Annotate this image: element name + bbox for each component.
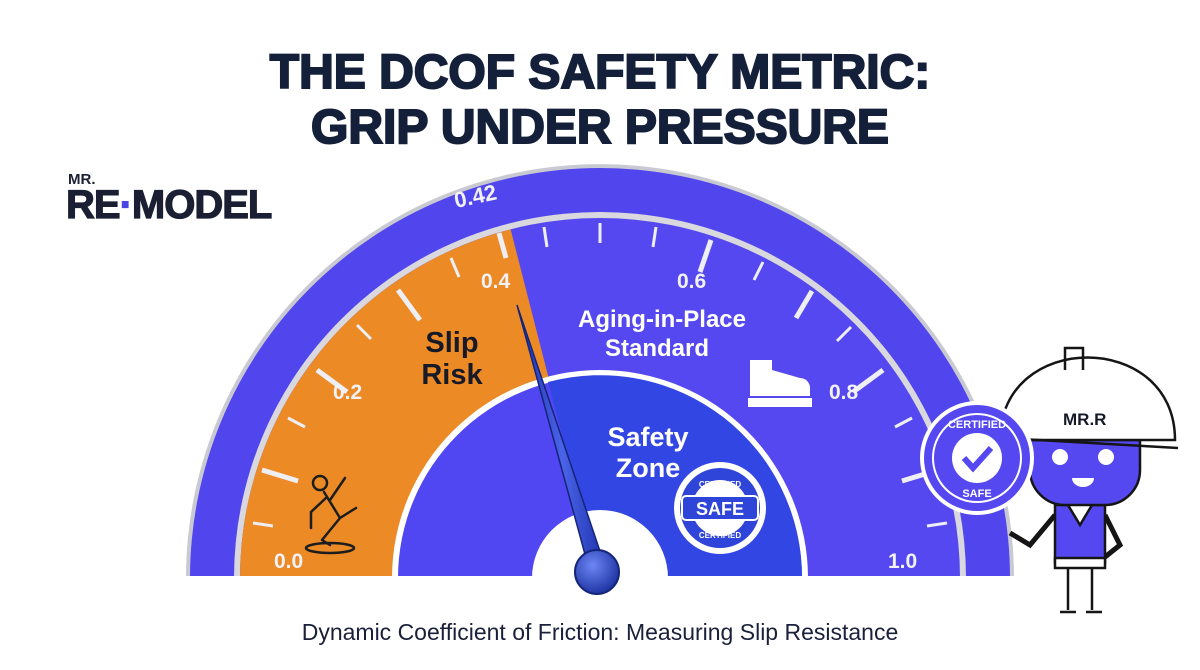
aging-in-place label: Aging-in-Place: [578, 306, 746, 333]
safety zone label: Safety: [607, 422, 689, 452]
face: [240, 218, 960, 578]
scale labels: 0.6: [677, 270, 706, 293]
scale labels: 1.0: [888, 550, 917, 573]
orange slip risk sector: [240, 229, 549, 578]
legs: [1060, 565, 1102, 612]
scale labels: 0.4: [481, 270, 511, 293]
gauge: [150, 164, 1050, 646]
badge: certified safe: SAFE: [696, 499, 744, 519]
slip risk label: [421, 327, 483, 391]
badge: certified safe: CERTIFIED: [699, 480, 741, 489]
outer ring: [186, 164, 1014, 578]
needle: [517, 305, 619, 594]
title: [270, 46, 930, 154]
helmet: [1000, 358, 1175, 440]
aging-in-place label: [578, 306, 746, 362]
aging-in-place label: Standard: [605, 335, 709, 362]
title: THE DCOF SAFETY METRIC:: [270, 46, 930, 99]
scale labels: 0.2: [333, 381, 362, 404]
scale labels: 0.8: [829, 381, 859, 404]
badge: certified safe seal: CERTIFIED: [948, 419, 1006, 431]
icon: boot: [748, 360, 812, 407]
safety zone label: Zone: [616, 453, 680, 483]
badge: certified safe seal: [922, 403, 1032, 513]
character: Mr. R robot mascot: [1000, 348, 1178, 612]
body vest: [1055, 505, 1105, 563]
logo: RE·MODEL: [66, 183, 272, 227]
face: [1030, 440, 1140, 505]
badge: certified safe: CERTIFIED: [699, 531, 741, 540]
icon: slipping person: [306, 476, 356, 553]
logo: MR.: [68, 171, 96, 188]
safety zone label: [607, 422, 689, 483]
ticks: [248, 223, 947, 578]
scale labels: 0.42: [452, 180, 499, 213]
title: GRIP UNDER PRESSURE: [311, 101, 889, 154]
arms: [1010, 515, 1120, 557]
slip risk label: Risk: [421, 359, 483, 391]
slip risk label: Slip: [425, 327, 479, 359]
caption: Dynamic Coefficient of Friction: Measuring Slip Resistance: [302, 619, 898, 645]
badge: certified safe: [674, 462, 766, 554]
badge: certified safe seal: SAFE: [962, 488, 992, 500]
inner safety disc: [392, 370, 808, 578]
scale labels: [274, 180, 917, 573]
character: Mr. R robot mascot: MR.R: [1063, 410, 1106, 429]
scale labels: 0.0: [274, 550, 303, 573]
